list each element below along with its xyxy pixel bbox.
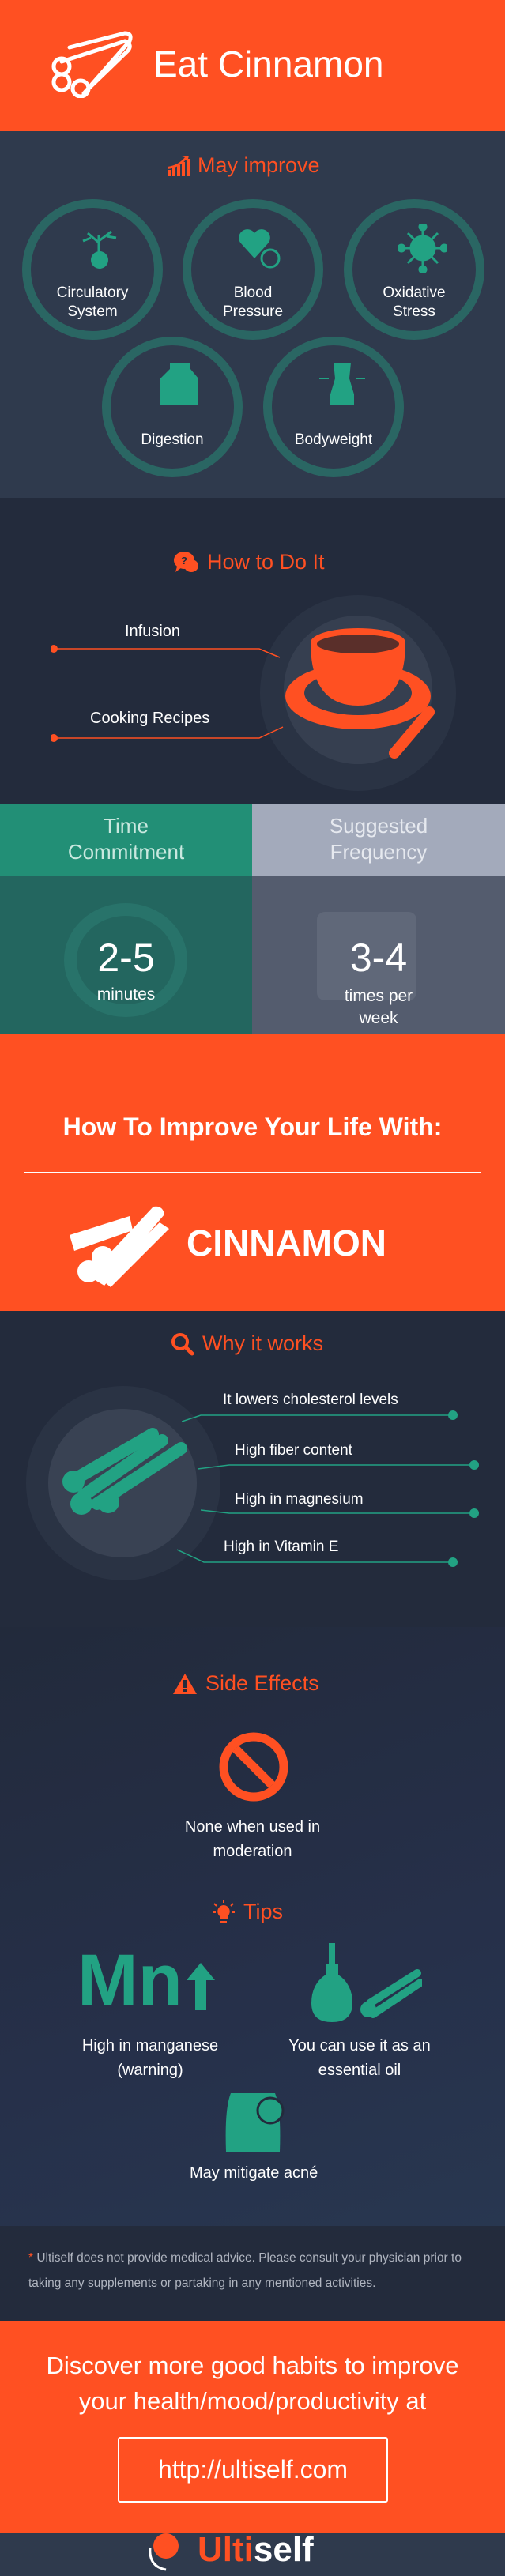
panel: time commitment [0,804,252,1034]
heading: suggested frequency: Suggested [330,814,428,838]
tip: manganese: (warning) [117,2062,183,2079]
heading: how to do it: How to Do It [207,550,325,574]
heading: suggested frequency: Frequency [330,840,427,864]
circle: circulatory: Circulatory [57,284,128,301]
icon: no sign [220,1732,288,1802]
logo: Ultiself [198,2530,314,2569]
panel: side effects and tips [0,1627,505,2226]
illustration: cup [284,616,435,764]
value: 3-4 times per week: 3-4 [350,936,407,980]
logo [149,2530,314,2571]
url box [118,2437,388,2503]
circle: circulatory: System [67,303,118,320]
icon: clock bg [64,903,187,1017]
circle: oxidative stress: Oxidative [383,284,446,301]
label: cooking recipes [51,710,283,742]
text: discover: your health/mood/productivity at [79,2387,426,2415]
item: fiber [198,1442,479,1470]
title: Eat Cinnamon [153,43,384,85]
header [0,0,505,131]
icon: calendar bg [317,912,416,1000]
item: fiber: High fiber content [235,1442,352,1459]
heading: time commitment: Commitment [68,840,184,864]
heading: time commitment [68,814,185,864]
heading: tips [213,1900,283,1923]
text: none when used: None when used in [185,1818,320,1836]
icon: cinnamon sticks [70,1206,169,1287]
item: vitamin E: High in Vitamin E [224,1538,338,1555]
tip: acne [190,2093,318,2182]
heading: tips: Tips [243,1900,283,1923]
icon: cinnamon sticks outline [52,32,133,98]
panel: call to action [0,2321,505,2533]
panel: suggested frequency: week [359,1009,398,1027]
tip: acne: May mitigate acné [190,2164,318,2182]
url box: http://ultiself.com [158,2455,348,2484]
illustration [48,1409,197,1557]
heading: time commitment: Time [104,814,149,838]
text: none when used: moderation [213,1843,292,1860]
panel: suggested frequency: times per [345,987,413,1005]
panel: suggested frequency [252,804,505,1034]
heading: side effects: Side Effects [205,1671,319,1695]
value: 2-5 minutes: 2-5 [97,936,155,980]
heading: Why it works [202,1331,323,1355]
heading: suggested frequency [330,814,428,864]
item: vitamin E [177,1538,458,1567]
circle: blood pressure [183,199,323,340]
label: cooking recipes: Cooking Recipes [90,710,209,727]
text: discover: Discover more good habits to improve [46,2352,459,2379]
text: none when used [185,1818,320,1860]
tip: manganese: Mn [77,1940,183,2021]
circle: bodyweight [263,337,404,477]
tip: essential oil: You can use it as an [288,2037,431,2054]
heading: how to do it: ? [181,555,187,566]
tip: essential oil: essential oil [318,2062,401,2079]
title: CINNAMON: CINNAMON [187,1222,386,1264]
item: cholesterol [182,1392,458,1422]
item: magnesium [201,1491,479,1518]
circle: oxidative stress: Stress [393,303,435,320]
heading: How To Improve Your Life With: [63,1113,442,1141]
tip: essential oil [288,1943,431,2079]
circle: circulatory [22,199,163,340]
circle: digestion: Digestion [141,431,204,448]
text: discover [46,2352,459,2415]
footer [0,2533,505,2576]
item: magnesium: High in magnesium [235,1491,364,1508]
tip: manganese [77,1940,218,2079]
panel: may improve [0,131,505,498]
circle: blood pressure: Blood [234,284,272,301]
panel: how to do it [0,498,505,804]
disclaimer: * Ultiself does not provide medical advice. Please consult your physician prior to taking any supplements or partaking in any mentioned activities. [28,2251,462,2290]
circle: bodyweight: Bodyweight [295,431,372,448]
circle: oxidative stress [344,199,484,340]
circle: digestion [102,337,243,477]
tip: manganese: High in manganese [82,2037,218,2054]
label: infusion: Infusion [125,623,180,640]
label: infusion [51,623,280,658]
panel: time commitment: minutes [97,985,155,1004]
heading: may improve: May improve [198,153,320,177]
circle: blood pressure: Pressure [223,303,283,320]
panel: how to improve [0,1034,505,1311]
item: cholesterol: It lowers cholesterol levels [223,1392,398,1408]
panel: why it works [0,1311,505,1627]
